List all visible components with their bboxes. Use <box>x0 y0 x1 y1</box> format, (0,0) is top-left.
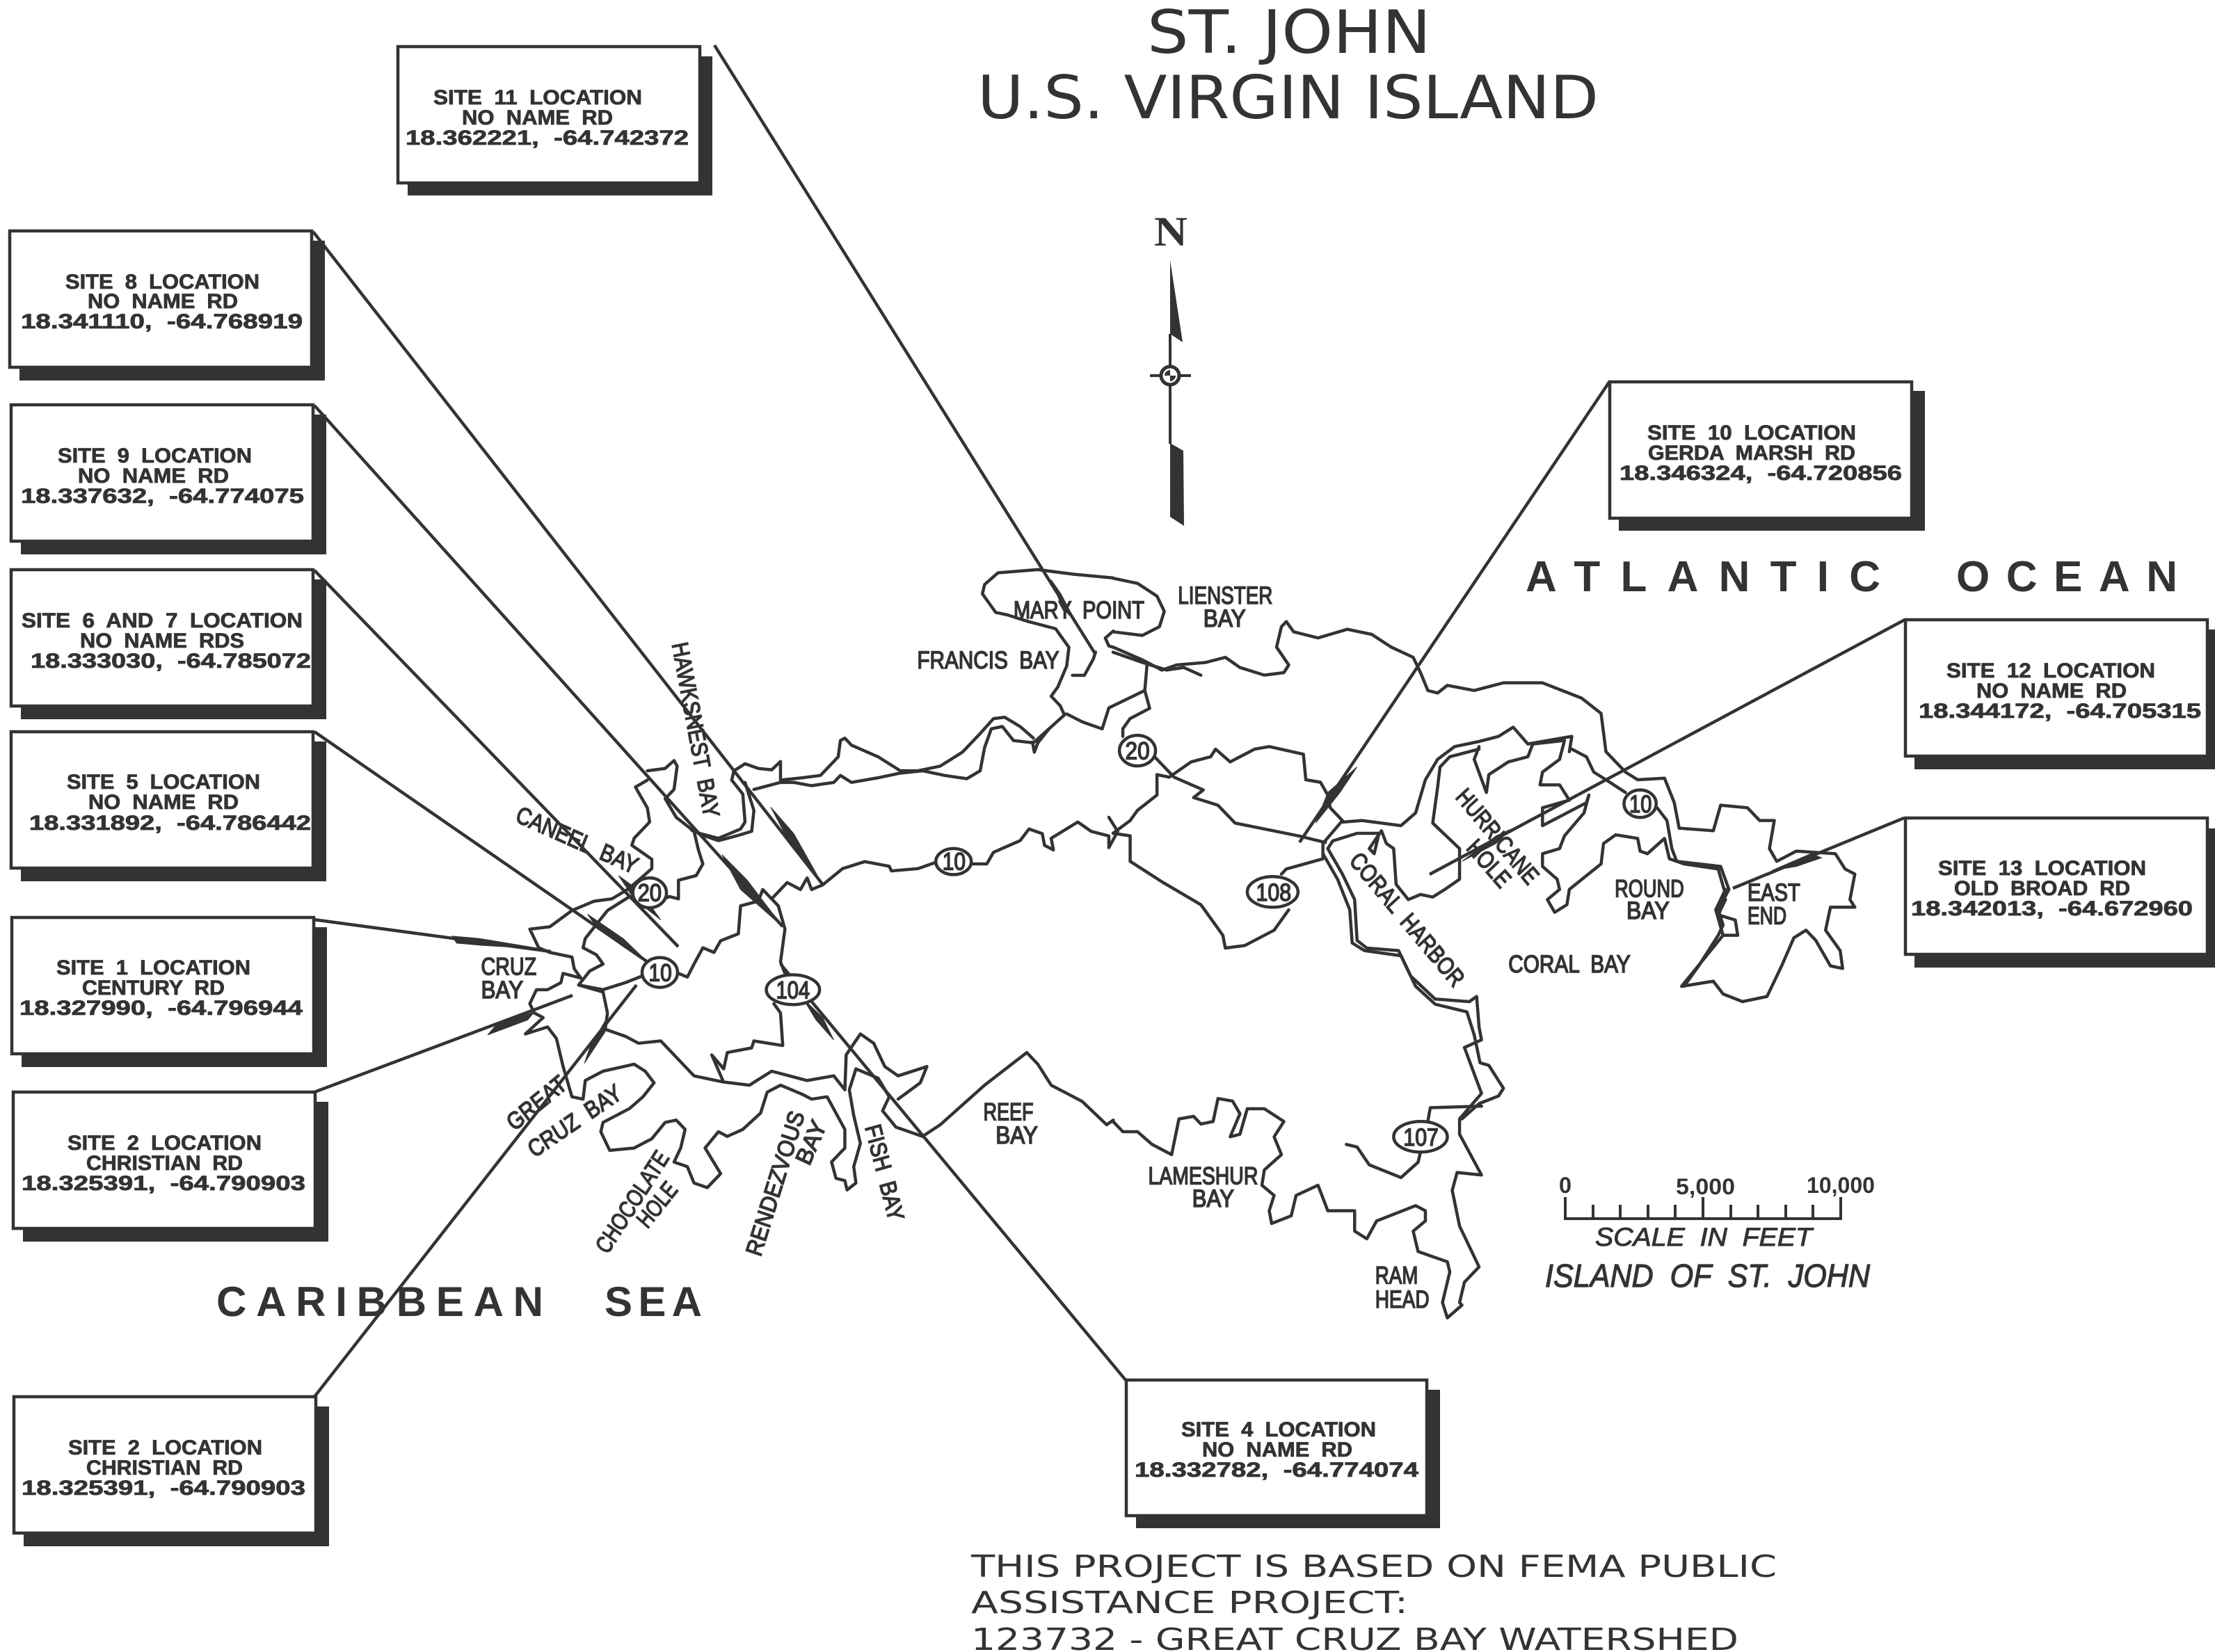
map place labels, east: HURRICANE <box>1450 784 1544 890</box>
callout: site 11: SITE 11 LOCATION <box>433 86 642 109</box>
callout: site 1 <box>12 917 327 1067</box>
callout: site 1: 18.327990, -64.796944 <box>19 997 303 1020</box>
leader line: site 12 <box>1430 620 1905 874</box>
callout: site 13: 18.342013, -64.672960 <box>1911 897 2193 920</box>
road shields: 10 <box>1629 791 1652 818</box>
north arrow: N <box>1154 209 1188 255</box>
map place labels, east: CORAL HARBOR <box>1344 847 1469 992</box>
scale bar: 10,000 <box>1807 1173 1875 1198</box>
callout: site 9: 18.337632, -64.774075 <box>21 485 304 508</box>
map place labels, west: CRUZ BAY <box>523 1080 627 1163</box>
callout: site 4 <box>1126 1380 1440 1528</box>
map place labels, east: BAY <box>1192 1185 1234 1212</box>
map place labels, east: HOLE <box>1462 834 1516 893</box>
callout: site 12 <box>1905 620 2215 769</box>
callout: site 11 <box>398 47 712 195</box>
map place labels, east: RAM <box>1375 1262 1418 1290</box>
map place labels, west: RENDEZVOUS <box>741 1108 810 1259</box>
scale bar <box>1545 1173 1875 1294</box>
callout: site 6 and 7 <box>11 570 326 719</box>
callout: site 9: SITE 9 LOCATION <box>58 444 252 467</box>
road shields: 20 <box>638 880 662 907</box>
leader line: site 13 <box>1733 818 1904 888</box>
callout: site 6 and 7: SITE 6 AND 7 LOCATION <box>22 609 303 632</box>
callout: site 11: NO NAME RD <box>462 106 613 129</box>
road shields: 107 <box>1403 1124 1439 1151</box>
callout: site 10: GERDA MARSH RD <box>1648 442 1855 465</box>
scale bar: 0 <box>1559 1173 1572 1198</box>
leader line: site 10 <box>1300 381 1610 842</box>
leader line: site 4 <box>781 964 1126 1380</box>
callout: site 2 lower: CHRISTIAN RD <box>86 1457 243 1479</box>
leader line: site 6 and 7 <box>314 570 678 947</box>
map place labels, west: FRANCIS BAY <box>917 647 1059 674</box>
footer note: ASSISTANCE PROJECT: <box>971 1585 1408 1621</box>
title: U.S. VIRGIN ISLAND <box>977 63 1599 133</box>
callout: site 4: 18.332782, -64.774074 <box>1135 1459 1418 1482</box>
map place labels, west: HAWKSNEST BAY <box>666 640 724 820</box>
footer note <box>970 1549 1777 1652</box>
callout: site 5: 18.331892, -64.786442 <box>29 812 311 835</box>
callout: site 11: 18.362221, -64.742372 <box>406 127 689 150</box>
callout: site 1: CENTURY RD <box>82 977 225 1000</box>
callout: site 8 <box>10 231 325 380</box>
map place labels, west: CANEEL BAY <box>512 801 642 880</box>
scale bar: SCALE IN FEET <box>1595 1223 1814 1251</box>
callout: site 2 lower: 18.325391, -64.790903 <box>22 1477 305 1500</box>
map place labels, east: ROUND <box>1615 876 1684 903</box>
sea label: Caribbean Sea: CARIBBEAN <box>216 1278 543 1325</box>
road shields: 108 <box>1256 879 1291 906</box>
map place labels, west: CRUZ <box>481 954 536 981</box>
ocean label: Atlantic Ocean <box>1526 553 2177 601</box>
map place labels, east: HEAD <box>1375 1286 1430 1313</box>
callout: site 2 upper <box>13 1092 328 1242</box>
callout: site 2 upper: SITE 2 LOCATION <box>67 1132 262 1155</box>
callout: site 2 upper: CHRISTIAN RD <box>86 1152 243 1175</box>
callout: site 6 and 7: 18.333030, -64.785072 <box>31 650 311 673</box>
callout: site 5 <box>11 732 326 881</box>
callout: site 4: NO NAME RD <box>1202 1438 1352 1461</box>
map place labels, east: END <box>1748 903 1786 930</box>
callout: site 8: SITE 8 LOCATION <box>65 271 259 294</box>
north arrow <box>1150 209 1191 526</box>
map place labels, west: BAY <box>995 1122 1038 1149</box>
callout: site 8: 18.341110, -64.768919 <box>21 310 303 333</box>
callout: site 5: SITE 5 LOCATION <box>67 771 260 794</box>
leader line: site 9 <box>314 406 783 927</box>
map place labels, east: BAY <box>1626 898 1670 924</box>
callout: site 6 and 7: NO NAME RDS <box>80 629 244 652</box>
scale bar: 5,000 <box>1676 1174 1735 1199</box>
map place labels, east: CORAL BAY <box>1508 952 1631 978</box>
leader line: site 1 <box>314 920 551 952</box>
map place labels, east: BAY <box>1204 605 1246 632</box>
leader line: site 2 upper <box>314 995 573 1092</box>
callout: site 13: OLD BROAD RD <box>1954 877 2130 900</box>
callout: site 1: SITE 1 LOCATION <box>56 956 250 979</box>
sea label: Caribbean Sea <box>216 1278 702 1325</box>
island map coastline, west part <box>525 570 1144 1190</box>
leader line: site 11 <box>714 45 1096 655</box>
map place labels, west <box>481 597 1144 1259</box>
road shields: 104 <box>776 977 810 1004</box>
callout: site 5: NO NAME RD <box>88 791 239 814</box>
map place labels, west: GREAT <box>502 1070 572 1136</box>
callout: site 12: NO NAME RD <box>1976 680 2127 703</box>
title <box>977 0 1599 133</box>
callout: site 13: SITE 13 LOCATION <box>1938 857 2146 880</box>
scale bar: ISLAND OF ST. JOHN <box>1545 1258 1871 1294</box>
callout: site 12: SITE 12 LOCATION <box>1946 659 2155 682</box>
callout: site 2 lower: SITE 2 LOCATION <box>68 1436 262 1459</box>
map place labels, east: EAST <box>1748 879 1800 906</box>
map place labels, east: LIENSTER <box>1178 582 1272 609</box>
callout: site 9: NO NAME RD <box>78 465 229 488</box>
map place labels, west: BAY <box>481 977 523 1004</box>
ocean label: Atlantic Ocean: OCEAN <box>1956 553 2177 601</box>
callout: site 2 upper: 18.325391, -64.790903 <box>22 1172 305 1195</box>
leader line: site 5 <box>314 732 648 962</box>
callout: site 9 <box>11 405 326 554</box>
map place labels, east: LAMESHUR <box>1149 1163 1258 1190</box>
map place labels, west: BAY <box>791 1116 832 1169</box>
callout: site 2 lower <box>14 1397 329 1546</box>
road shields: 10 <box>649 960 672 987</box>
road shields <box>633 735 1656 1152</box>
leader line: site 8 <box>313 232 823 885</box>
ocean label: Atlantic Ocean: ATLANTIC <box>1526 553 1880 601</box>
road shields: 20 <box>1126 738 1150 765</box>
callout: site 12: 18.344172, -64.705315 <box>1919 700 2201 723</box>
map place labels, west: REEF <box>983 1099 1034 1125</box>
map place labels, west: HOLE <box>632 1176 683 1233</box>
callout: site 10: SITE 10 LOCATION <box>1647 422 1856 444</box>
map place labels, west: FISH BAY <box>860 1121 909 1224</box>
leader line: site 2 lower <box>314 985 637 1397</box>
road shields: 10 <box>943 849 966 876</box>
callout: site 13 <box>1905 818 2215 968</box>
callout: site 4: SITE 4 LOCATION <box>1181 1418 1376 1441</box>
map place labels, west: MARY POINT <box>1014 597 1144 624</box>
footer note: THIS PROJECT IS BASED ON FEMA PUBLIC <box>970 1549 1777 1585</box>
island map coastline, east part <box>1113 578 1855 1318</box>
callout: site 8: NO NAME RD <box>88 290 238 313</box>
map place labels, west: CHOCOLATE <box>591 1146 675 1258</box>
callout: site 10 <box>1610 382 1925 531</box>
map place labels, east <box>1149 582 1800 1313</box>
sea label: Caribbean Sea: SEA <box>605 1278 702 1325</box>
callout: site 10: 18.346324, -64.720856 <box>1620 462 1902 485</box>
